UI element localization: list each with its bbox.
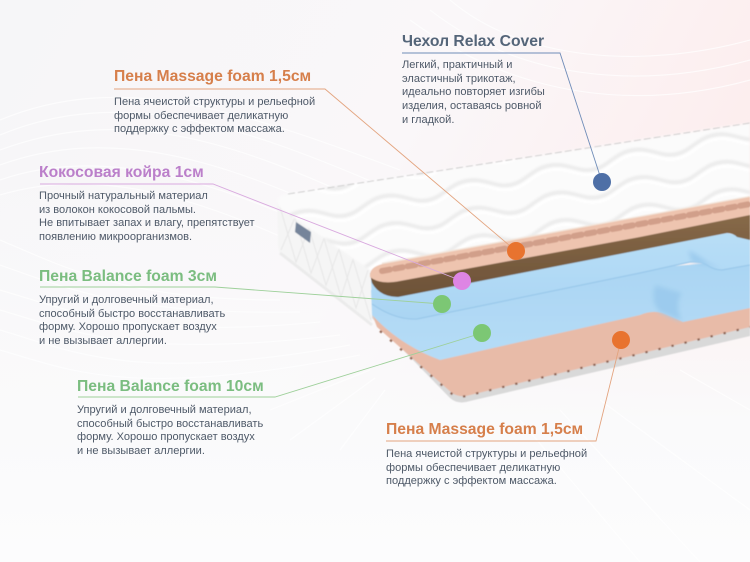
callout: cover: эластичный трикотаж,: [402, 73, 516, 85]
callout: balance foam 3 cm: и не вызывает аллергии.: [39, 335, 167, 347]
callout: top massage foam: Пена Massage foam 1,5см: [114, 68, 311, 85]
mattress side panel: [277, 201, 372, 325]
callout: balance foam 3 cm: форму. Хорошо пропускает воздух: [39, 321, 217, 333]
callout: bottom massage foam: Пена ячеистой структуры и рельефной: [386, 448, 587, 460]
bottom massage foam layer: [372, 300, 750, 396]
callout: coconut coir: из волокон кокосовой пальмы.: [39, 204, 196, 216]
callout: top massage foam: Пена ячеистой структуры и рельефной: [114, 96, 315, 108]
callout: cover: изделия, оставаясь ровной: [402, 100, 542, 112]
upper balance foam layer: [371, 233, 750, 319]
callout: bottom massage foam: Пена Massage foam 1,5см: [386, 421, 583, 438]
callout: cover: [402, 33, 545, 126]
callout: balance foam 10 cm: форму. Хорошо пропускает воздух: [77, 431, 255, 443]
callout: balance foam 3 cm: способный быстро восстанавливать: [39, 308, 225, 320]
callout: top massage foam: формы обеспечивает деликатную: [114, 110, 288, 122]
callout: coconut coir: [39, 164, 255, 243]
mattress top cover: [277, 123, 750, 270]
callout: coconut coir: Прочный натуральный материал: [39, 190, 208, 202]
callout: balance foam 10 cm: способный быстро восстанавливать: [77, 418, 263, 430]
callout: cover: идеально повторяет изгибы: [402, 86, 545, 98]
callout: balance foam 10 cm: и не вызывает аллергии.: [77, 445, 205, 457]
top massage foam layer: [370, 197, 750, 282]
callout: bottom massage foam: формы обеспечивает деликатную: [386, 462, 560, 474]
callout: cover: Легкий, практичный и: [402, 59, 512, 71]
callout: top massage foam: [114, 68, 315, 135]
callout: balance foam 10 cm: Пена Balance foam 10см: [77, 378, 264, 395]
callout: cover: Чехол Relax Cover: [402, 33, 544, 50]
callout: top massage foam: поддержку с эффектом массажа.: [114, 123, 285, 135]
callout: balance foam 3 cm: Пена Balance foam 3см: [39, 268, 217, 285]
callout: bottom massage foam: поддержку с эффектом массажа.: [386, 475, 557, 487]
callout: cover: и гладкой.: [402, 114, 454, 126]
brand label: [295, 222, 311, 243]
callout: balance foam 3 cm: [39, 268, 225, 347]
callout: coconut coir: Кокосовая койра 1см: [39, 164, 204, 181]
callout: balance foam 10 cm: [77, 378, 264, 457]
mattress bottom edge: [372, 300, 750, 402]
callout: balance foam 10 cm: Упругий и долговечный материал,: [77, 404, 252, 416]
callout: coconut coir: Не впитывает запах и влагу, препятствует: [39, 217, 255, 229]
callout: balance foam 3 cm: Упругий и долговечный материал,: [39, 294, 214, 306]
lower balance foam layer: [371, 260, 750, 360]
callout: coconut coir: появлению микроорганизмов.: [39, 231, 192, 243]
coconut coir layer: [370, 205, 750, 297]
callout: bottom massage foam: [386, 421, 587, 487]
